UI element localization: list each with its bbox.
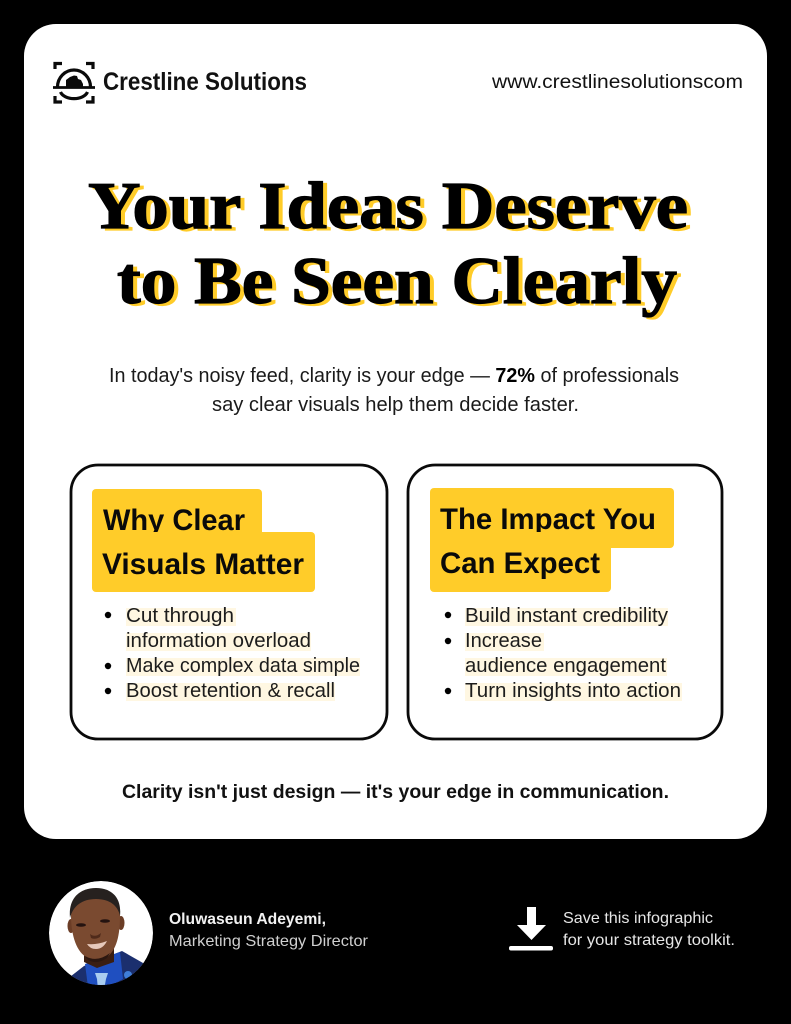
intro text: say clear visuals help them decide faster. <box>212 394 579 416</box>
website url: www.crestlinesolutionscom <box>491 71 743 93</box>
bullet list: reasons: Cut through <box>126 604 234 627</box>
save text: for your strategy toolkit. <box>563 932 735 949</box>
heading: The Impact You Can Expect: Can Expect <box>440 547 600 580</box>
footer: save call to action <box>509 907 735 950</box>
bullet list: impacts: Turn insights into action <box>465 679 681 702</box>
bullet list: impacts: Build instant credibility <box>465 604 669 627</box>
intro text: In today's noisy feed, clarity is your edge — 72% of professionals <box>109 365 679 387</box>
heading: Why Clear Visuals Matter: Visuals Matter <box>102 548 305 581</box>
title: Your Ideas Deserve <box>88 169 688 243</box>
header: logo and brand name <box>53 64 307 102</box>
heading: The Impact You Can Expect <box>430 488 674 592</box>
title: to Be Seen Clearly <box>121 246 681 320</box>
bullet list: reasons: information overload <box>126 629 311 652</box>
heading: The Impact You Can Expect: The Impact You <box>440 503 656 536</box>
icon: Crestline logo <box>53 64 95 102</box>
bullet list: reasons: Make complex data simple <box>126 654 360 677</box>
heading: Why Clear Visuals Matter: Why Clear <box>103 504 246 537</box>
panel: The Impact You Can Expect <box>408 465 722 739</box>
title: to Be Seen Clearly <box>117 244 677 318</box>
intro text <box>109 365 679 416</box>
closing statement: Clarity isn't just design — it's your edge in communication. <box>122 781 669 803</box>
bullet list: reasons <box>105 604 360 702</box>
save text <box>563 910 735 949</box>
title: Your Ideas Deserve <box>92 171 692 245</box>
save text: Save this infographic <box>563 910 713 927</box>
panel: Why Clear Visuals Matter <box>71 465 387 739</box>
panel: main white card <box>24 24 767 839</box>
author name and role: Marketing Strategy Director <box>169 933 369 950</box>
bullet list: reasons: Boost retention & recall <box>126 679 335 702</box>
brand name: Crestline Solutions <box>103 68 307 96</box>
bullet list: impacts: audience engagement <box>465 654 666 677</box>
bullet list: impacts: Increase <box>465 629 542 652</box>
author name and role <box>169 911 369 950</box>
bullet list: impacts <box>445 604 682 702</box>
footer: author <box>49 881 369 990</box>
icon: download arrow <box>509 907 553 950</box>
heading: Why Clear Visuals Matter <box>92 489 315 592</box>
photo: author portrait <box>49 881 153 990</box>
author name and role: Oluwaseun Adeyemi, <box>169 911 326 928</box>
title <box>88 169 692 320</box>
